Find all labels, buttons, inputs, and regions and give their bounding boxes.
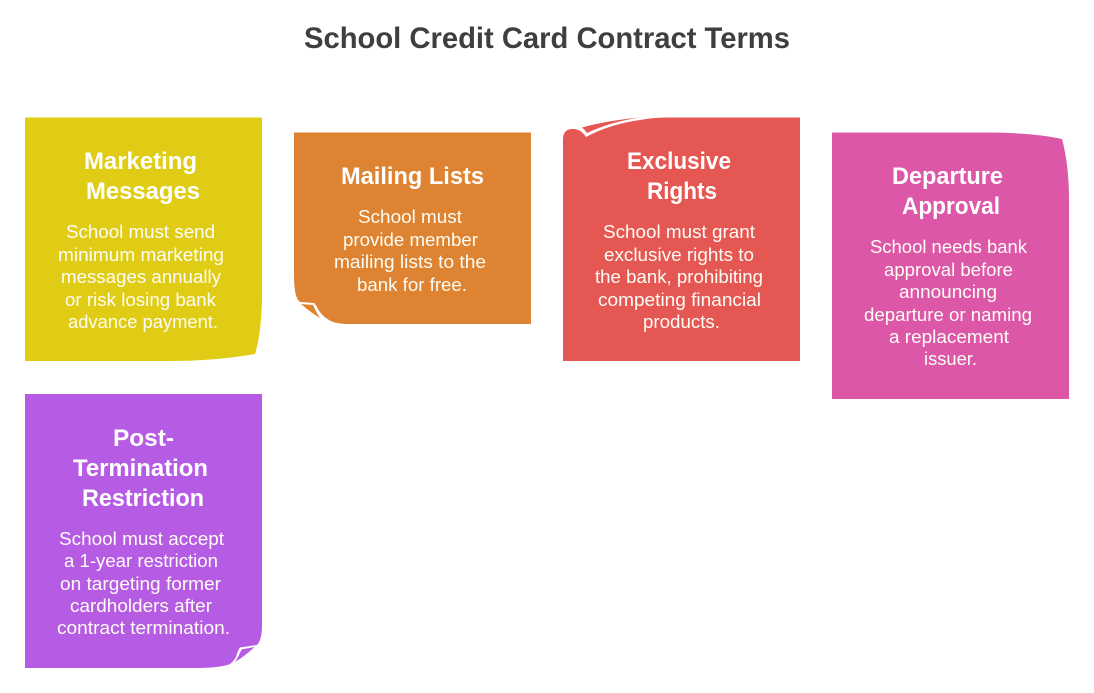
- title: School Credit Card Contract Terms: [304, 22, 790, 55]
- text: mailing lists: provide member: [343, 230, 478, 250]
- text: marketing messages: advance payment.: [68, 312, 218, 332]
- text: marketing messages: or risk losing bank: [65, 290, 217, 310]
- heading: marketing messages: Messages: [86, 178, 200, 205]
- text: marketing messages: minimum marketing: [58, 245, 224, 265]
- text: mailing lists: School must: [358, 207, 462, 227]
- heading: post-termination restriction: Post-: [113, 425, 174, 452]
- heading: exclusive rights: Exclusive: [627, 148, 731, 175]
- text: departure approval: [864, 237, 1032, 369]
- card shape: purple with curled corner: [25, 394, 262, 668]
- text: departure approval: School needs bank: [870, 237, 1028, 257]
- icon: curled corner purple: [235, 647, 254, 662]
- text: departure approval: approval before: [884, 260, 1013, 280]
- heading: exclusive rights: [627, 148, 731, 205]
- icon: curled corner orange: [301, 304, 320, 318]
- heading: mailing lists: Mailing Lists: [341, 163, 484, 190]
- heading: marketing messages: [84, 148, 200, 205]
- text: exclusive rights: exclusive rights to: [604, 245, 754, 265]
- text: mailing lists: bank for free.: [357, 275, 467, 295]
- heading: departure approval: Approval: [902, 193, 1000, 220]
- heading: post-termination restriction: Restriction: [82, 485, 204, 512]
- text: post-termination restriction: [57, 529, 230, 638]
- text: marketing messages: messages annually: [61, 267, 221, 287]
- text: post-termination restriction: a 1-year restriction: [64, 551, 218, 571]
- text: exclusive rights: competing financial: [598, 290, 761, 310]
- panel: marketing messages: [25, 118, 262, 361]
- text: mailing lists: [334, 207, 486, 295]
- text: post-termination restriction: School must accept: [59, 529, 224, 549]
- text: exclusive rights: the bank, prohibiting: [595, 267, 763, 287]
- heading: departure approval: [892, 163, 1003, 220]
- panel: departure approval: [832, 132, 1069, 399]
- panel: mailing lists: [294, 132, 531, 324]
- panel: post-termination restriction: [25, 394, 262, 668]
- text: departure approval: departure or naming: [864, 305, 1032, 325]
- text: departure approval: a replacement: [889, 327, 1009, 347]
- text: exclusive rights: [595, 222, 763, 332]
- panel: exclusive rights: [563, 118, 800, 361]
- text: post-termination restriction: on targeting former: [60, 574, 221, 594]
- heading: post-termination restriction: [73, 425, 208, 512]
- text: exclusive rights: School must grant: [603, 222, 755, 242]
- text: exclusive rights: products.: [643, 312, 720, 332]
- card shape: yellow: [25, 118, 262, 361]
- text: post-termination restriction: cardholders after: [70, 596, 212, 616]
- text: marketing messages: School must send: [66, 222, 215, 242]
- heading: exclusive rights: Rights: [647, 178, 717, 205]
- text: post-termination restriction: contract termination.: [57, 618, 230, 638]
- heading: marketing messages: Marketing: [84, 148, 197, 175]
- text: marketing messages: [58, 222, 224, 332]
- heading: post-termination restriction: Termination: [73, 455, 208, 482]
- text: mailing lists: mailing lists to the: [334, 252, 486, 272]
- card shape: orange with curled corner: [294, 132, 531, 324]
- text: departure approval: issuer.: [924, 349, 977, 369]
- heading: departure approval: Departure: [892, 163, 1003, 190]
- text: departure approval: announcing: [899, 282, 997, 302]
- card shape: pink: [832, 132, 1069, 399]
- card shape: red with curled corner: [563, 118, 800, 361]
- icon: curled corner red: [582, 118, 640, 133]
